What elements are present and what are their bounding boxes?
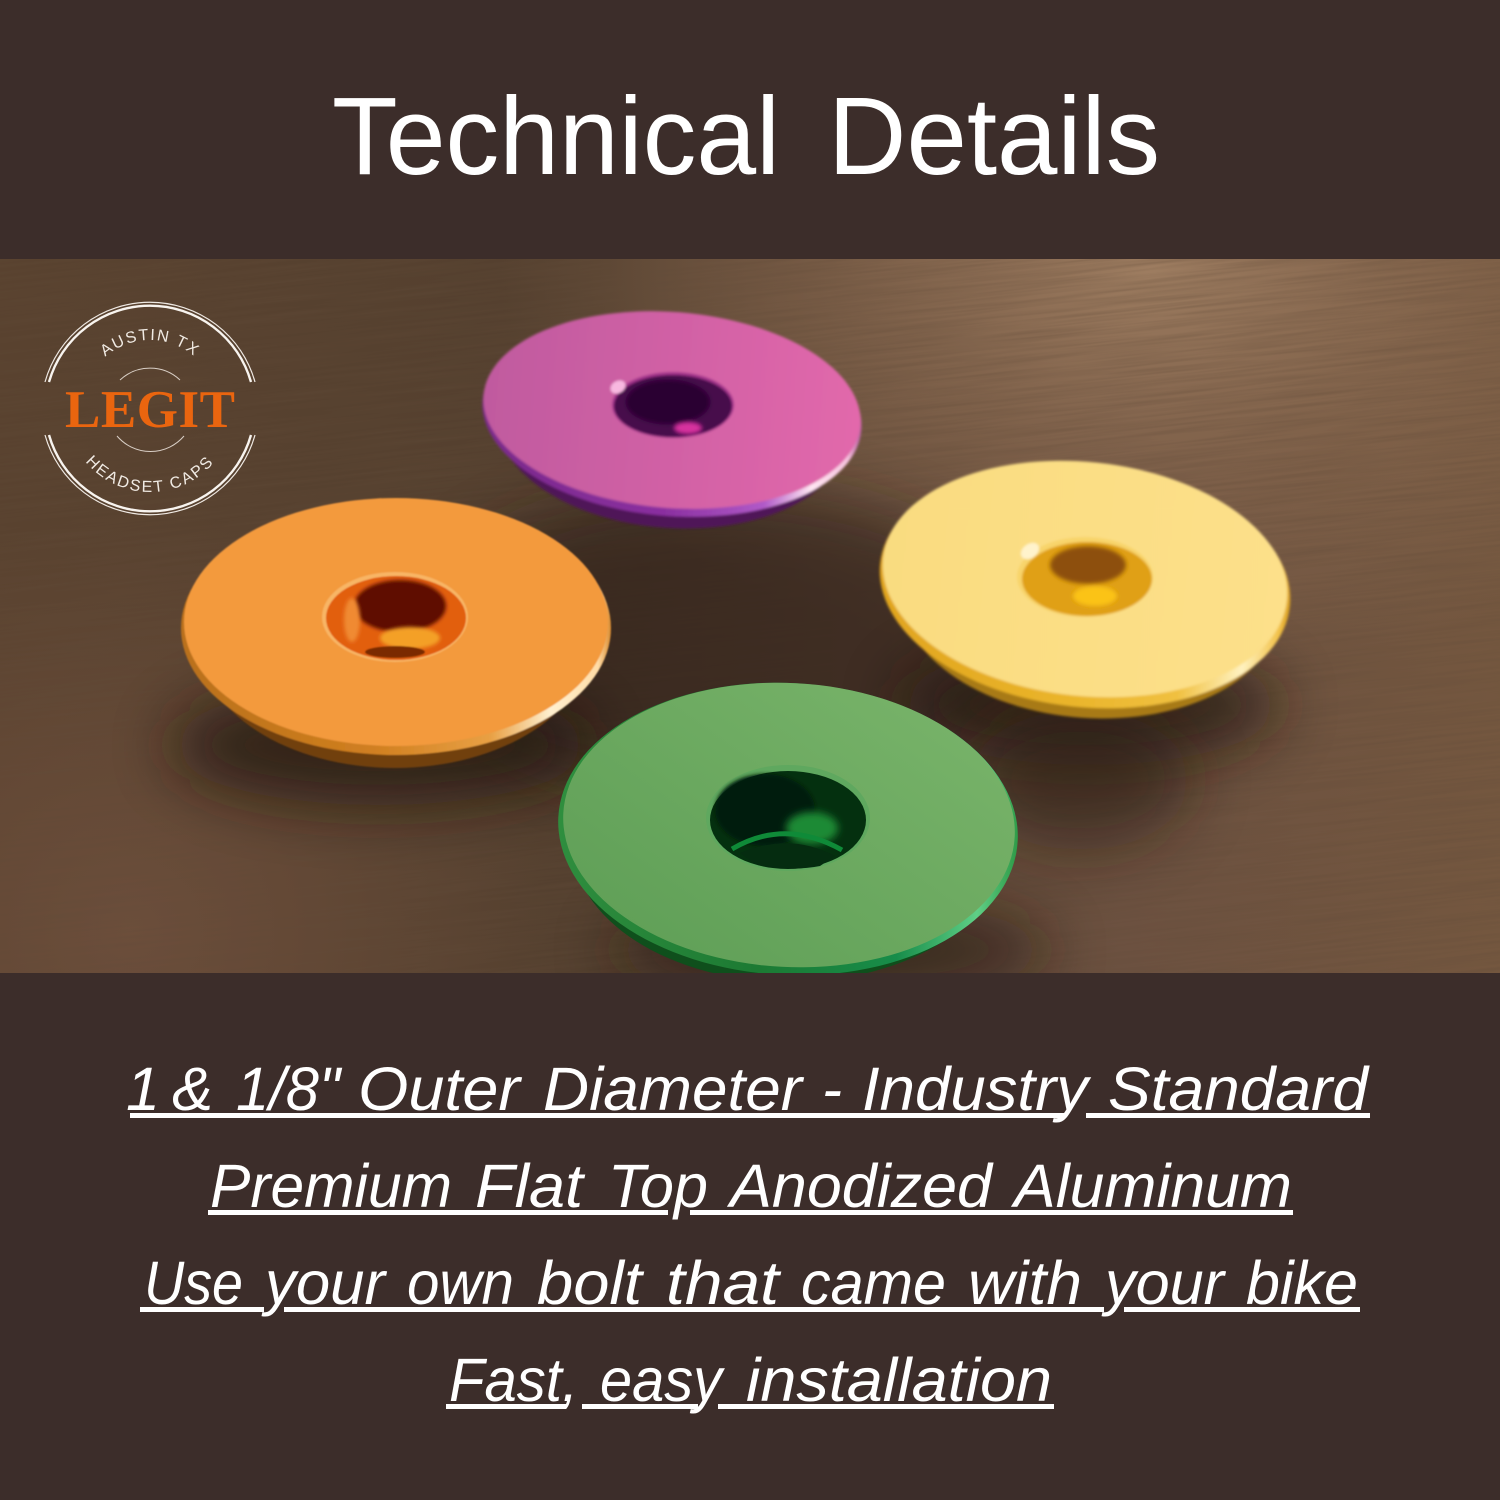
feature line 1: Industry [862,1055,1092,1123]
product photo [0,259,1500,973]
feature line 3: Use [144,1249,243,1317]
cap: yellow [878,459,1292,720]
logo text: Austin TX: AUSTIN TX [102,328,200,357]
feature line 3: your [261,1249,388,1317]
feature line 2: Anodized [726,1152,994,1220]
title: Details [828,75,1160,198]
feature line 4: easy [600,1346,725,1414]
feature line 1: & [172,1055,213,1123]
feature line 3: bike [1246,1249,1358,1317]
cap: green [558,682,1018,973]
feature line 3: bolt [537,1249,645,1317]
feature list [126,1055,1370,1414]
feature line 3: came [801,1249,946,1317]
feature line 2 [208,1152,1293,1220]
feature line 2: Top [608,1152,708,1220]
feature line 1: 1/8" [236,1055,342,1123]
feature line 3: that [666,1249,782,1317]
feature line 4: Fast, [449,1346,578,1414]
logo text: Legit: LEGIT [65,381,235,439]
cap: purple [481,310,863,530]
logo [44,302,256,516]
logo text: Headset Caps: HEADSET CAPS [86,455,212,492]
feature line 1 [126,1055,1370,1123]
feature line 4: installation [746,1346,1052,1414]
feature line 4 [446,1346,1054,1414]
feature line 1: Outer [358,1055,523,1123]
feature line 2: Premium [210,1152,452,1220]
feature line 3: own [407,1249,514,1317]
title [332,75,1160,198]
cap: orange [181,498,611,768]
feature line 1: 1 [126,1055,160,1123]
feature line 1: Diameter [543,1055,805,1123]
feature line 2: Aluminum [1010,1152,1292,1220]
feature line 3 [140,1249,1360,1317]
feature line 3: with [968,1249,1082,1317]
feature line 1: - [822,1055,842,1123]
feature line 1: Standard [1108,1055,1370,1123]
title: Technical [332,75,780,198]
feature line 3: your [1101,1249,1227,1317]
feature line 2: Flat [475,1152,586,1220]
